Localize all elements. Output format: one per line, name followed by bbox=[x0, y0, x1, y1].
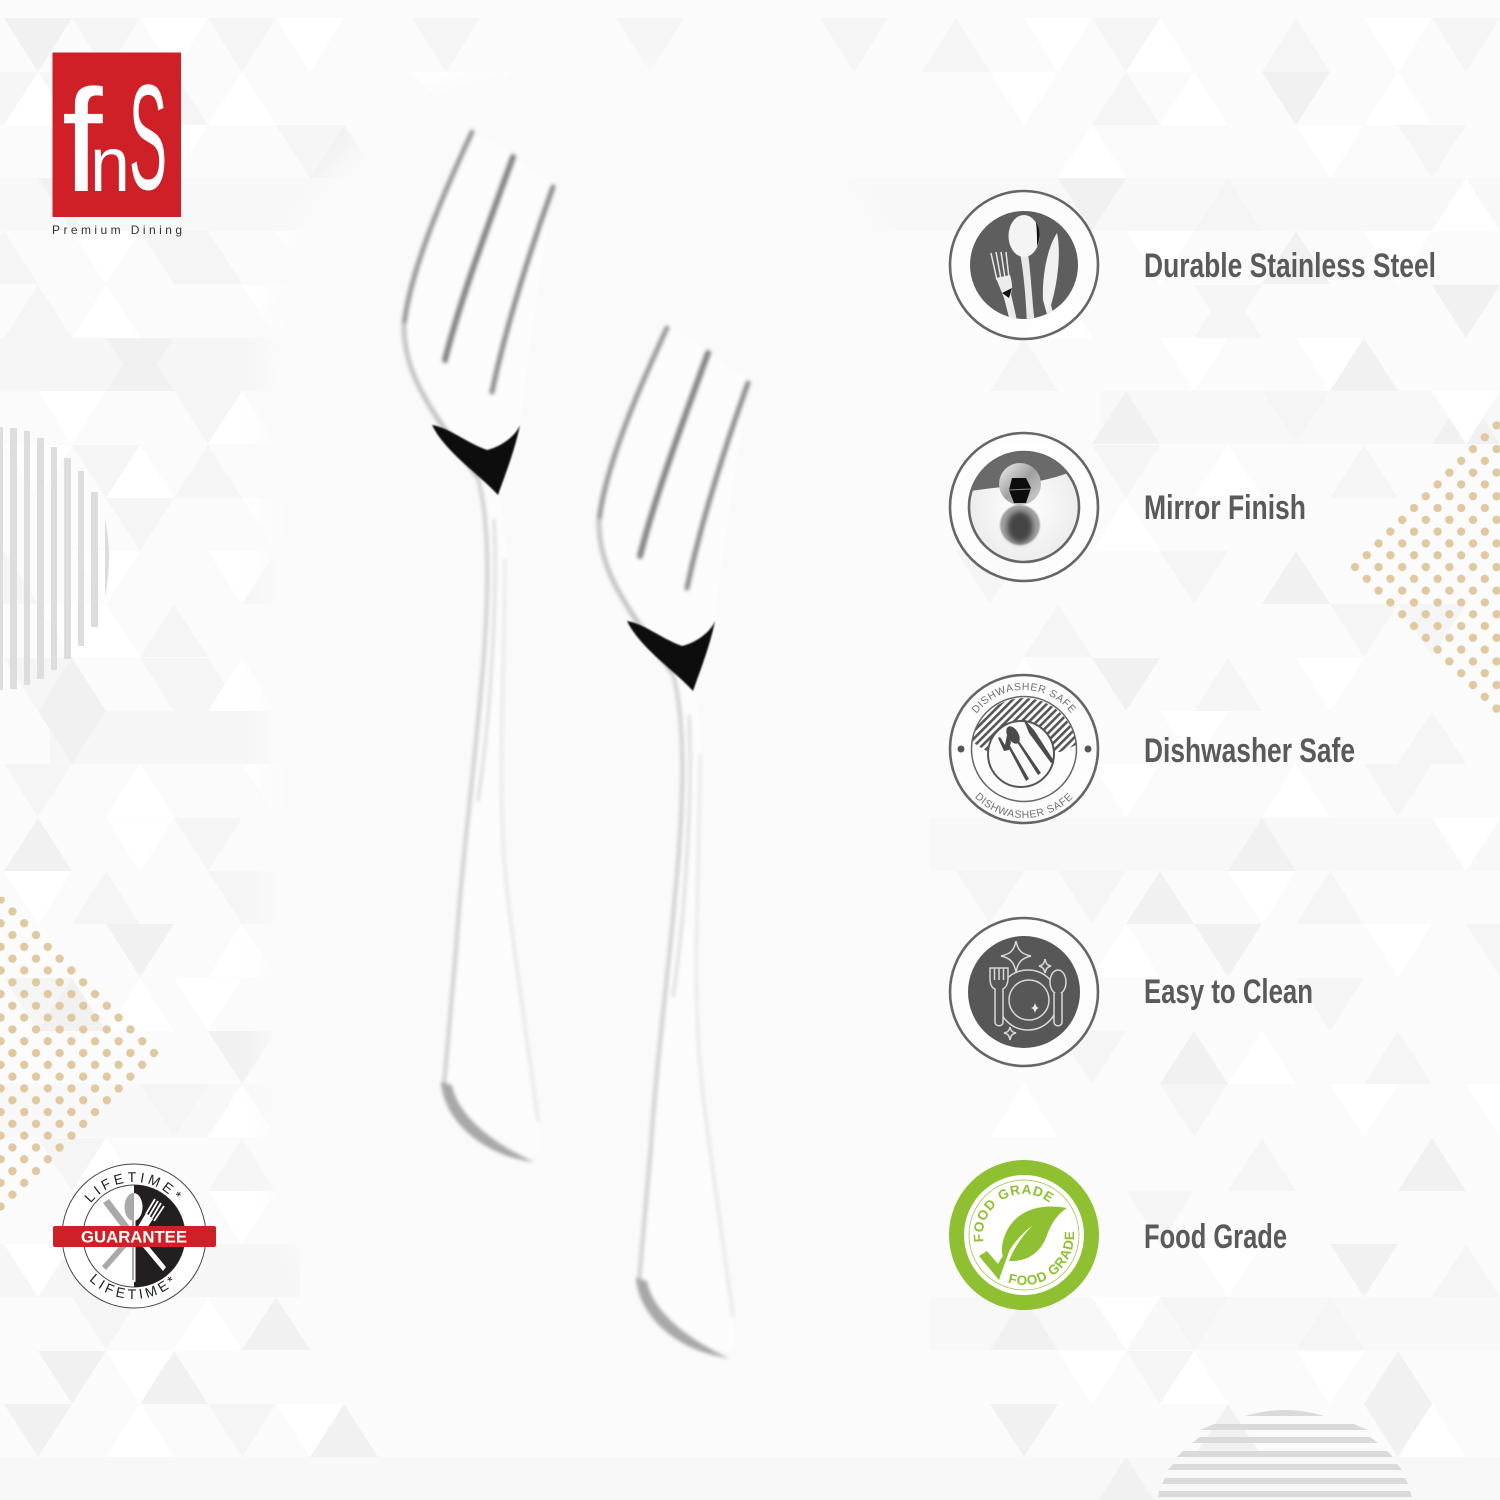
badge utensils grey bbox=[102, 1193, 142, 1280]
leaf bbox=[1002, 1206, 1067, 1261]
logo: FnS Premium Dining bbox=[52, 52, 182, 237]
logo: FnS Premium Dining: S bbox=[129, 54, 167, 222]
product photo: small fork bbox=[598, 326, 748, 1358]
feature: easy to clean bbox=[950, 918, 1313, 1066]
label: Food Grade bbox=[1144, 1218, 1287, 1256]
feature: mirror finish bbox=[950, 433, 1306, 581]
badge ribbon: GUARANTEE bbox=[81, 1228, 187, 1246]
icon: mirrored ball bbox=[950, 433, 1098, 581]
icon: food grade seal bbox=[949, 1160, 1099, 1310]
badge utensils white bbox=[134, 1193, 166, 1282]
seal arc text: DISHWASHER SAFE bbox=[975, 792, 1073, 818]
badge arc text bbox=[84, 1172, 181, 1299]
feature: durable stainless steel bbox=[950, 191, 1436, 339]
seal arc text: DISHWASHER SAFE bbox=[972, 682, 1076, 714]
badge arc text: LIFETIME* bbox=[84, 1172, 181, 1202]
logo: FnS Premium Dining: f bbox=[62, 59, 103, 222]
label: Easy to Clean bbox=[1144, 973, 1313, 1011]
label: Dishwasher Safe bbox=[1144, 732, 1355, 770]
icon: dishwasher safe seal bbox=[948, 674, 1100, 824]
logo: FnS Premium Dining: Premium Dining bbox=[52, 223, 182, 237]
lifetime guarantee badge bbox=[53, 1164, 216, 1308]
decoration: gold dot diamond left bbox=[0, 897, 161, 1214]
product photo: large fork bbox=[403, 130, 553, 1162]
decoration: striped half circle bottom bbox=[1158, 1410, 1412, 1497]
seal arc text bbox=[972, 682, 1076, 818]
seal arc text bbox=[974, 1184, 1074, 1286]
label: Mirror Finish bbox=[1144, 489, 1306, 527]
decoration: gold dot diamond right bbox=[1348, 415, 1500, 719]
icon: cutlery in circle bbox=[950, 191, 1098, 339]
icon: sparkling plate bbox=[950, 918, 1098, 1066]
seal arc text: FOOD GRADE bbox=[974, 1184, 1054, 1242]
decoration: striped half circle left bbox=[0, 427, 109, 690]
central soft white backdrop behind forks bbox=[262, 62, 912, 1412]
badge ribbon bbox=[53, 1226, 216, 1247]
seal arc text: FOOD GRADE bbox=[1008, 1232, 1074, 1286]
feature: dishwasher safe bbox=[948, 674, 1355, 824]
badge arc text: LIFETIME* bbox=[90, 1274, 172, 1299]
seal cutlery bbox=[998, 718, 1054, 781]
check mark bbox=[979, 1243, 1012, 1280]
feature: food grade bbox=[949, 1160, 1287, 1310]
logo: FnS Premium Dining: n bbox=[90, 120, 130, 208]
